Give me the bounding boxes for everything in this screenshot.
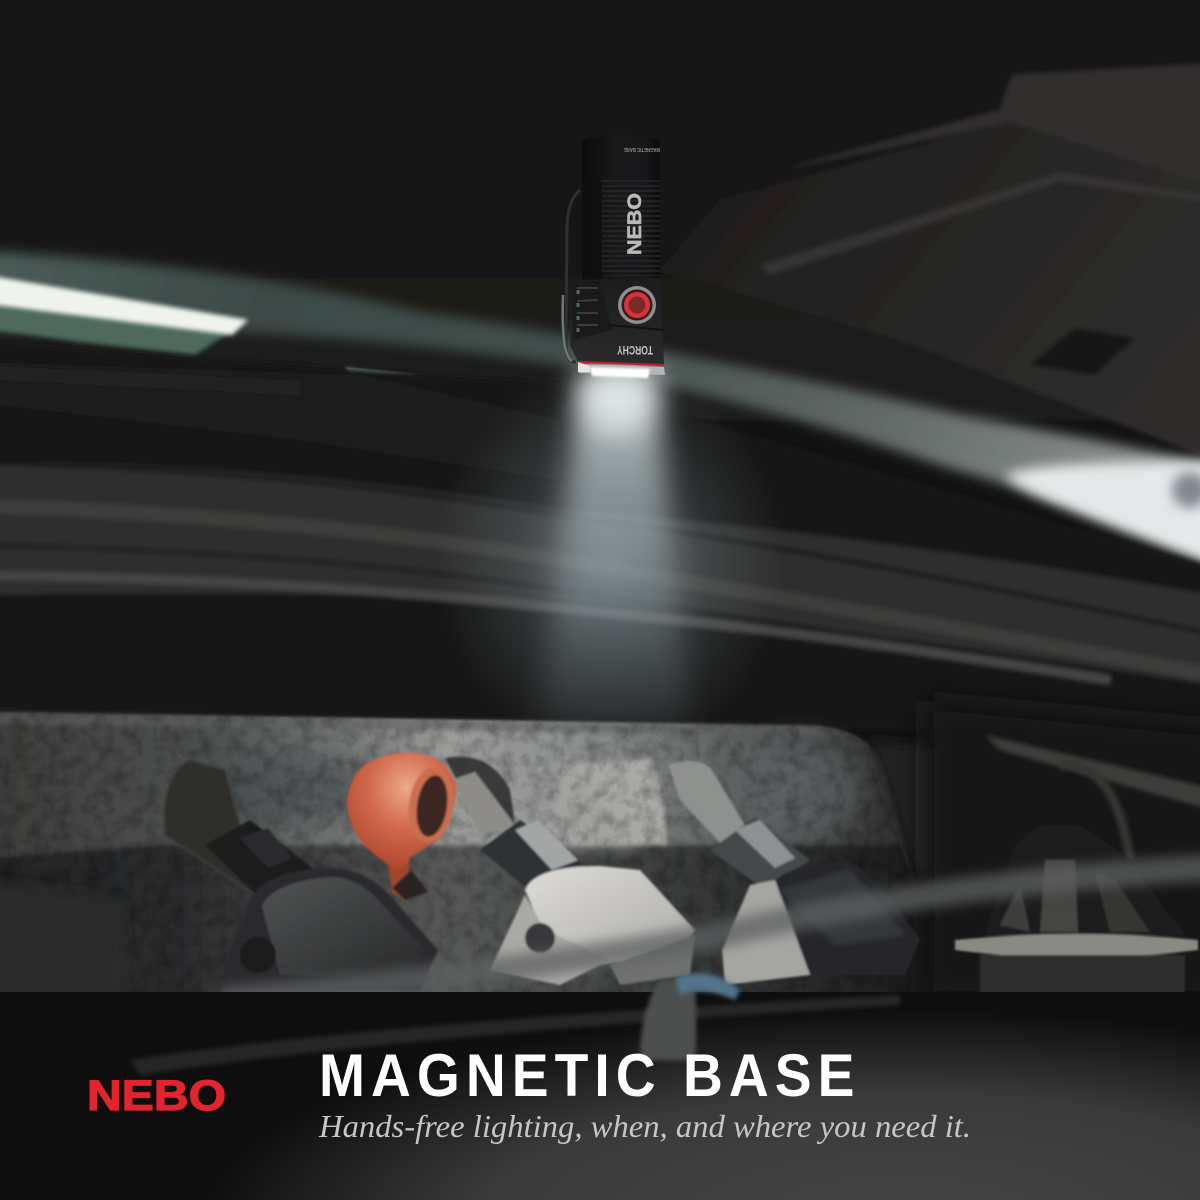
mid engine bay bands — [0, 340, 1200, 730]
clip — [566, 190, 580, 362]
body label: magnetic base: MAGNETIC BASE — [624, 146, 660, 152]
heading: MAGNETIC BASE — [319, 1043, 854, 1110]
NEBO logo on body: NEBO — [625, 193, 646, 255]
body — [582, 135, 660, 280]
flashlight — [563, 135, 665, 378]
center ignition coil — [445, 757, 695, 985]
highlight: right edge — [1005, 462, 1200, 575]
right ignition coil — [668, 761, 920, 985]
flashlight beam — [435, 360, 785, 760]
caption strip background — [0, 992, 1200, 1200]
blurred foreground darkness left — [0, 880, 130, 1010]
subheading: Hands-free lighting, when, and where you need it. — [318, 1108, 971, 1144]
head — [569, 278, 664, 364]
dust texture — [0, 712, 915, 992]
hood lip with light reflection — [0, 250, 1200, 575]
NEBO logo bottom: NEBO — [87, 1072, 226, 1120]
EGR valve right foreground — [955, 825, 1198, 1005]
power switch — [618, 286, 656, 324]
left ignition coil — [164, 760, 438, 990]
orange oil cap — [347, 753, 458, 900]
hood underside — [0, 0, 1200, 470]
right background bay — [870, 740, 985, 880]
foreground valve and blue wire — [640, 974, 740, 1060]
torchy label: TORCHY — [617, 343, 653, 355]
blurred foreground hose — [220, 866, 1200, 1000]
engine cover — [0, 700, 1200, 1000]
highlight: left edge — [0, 276, 248, 355]
red band — [578, 361, 664, 366]
